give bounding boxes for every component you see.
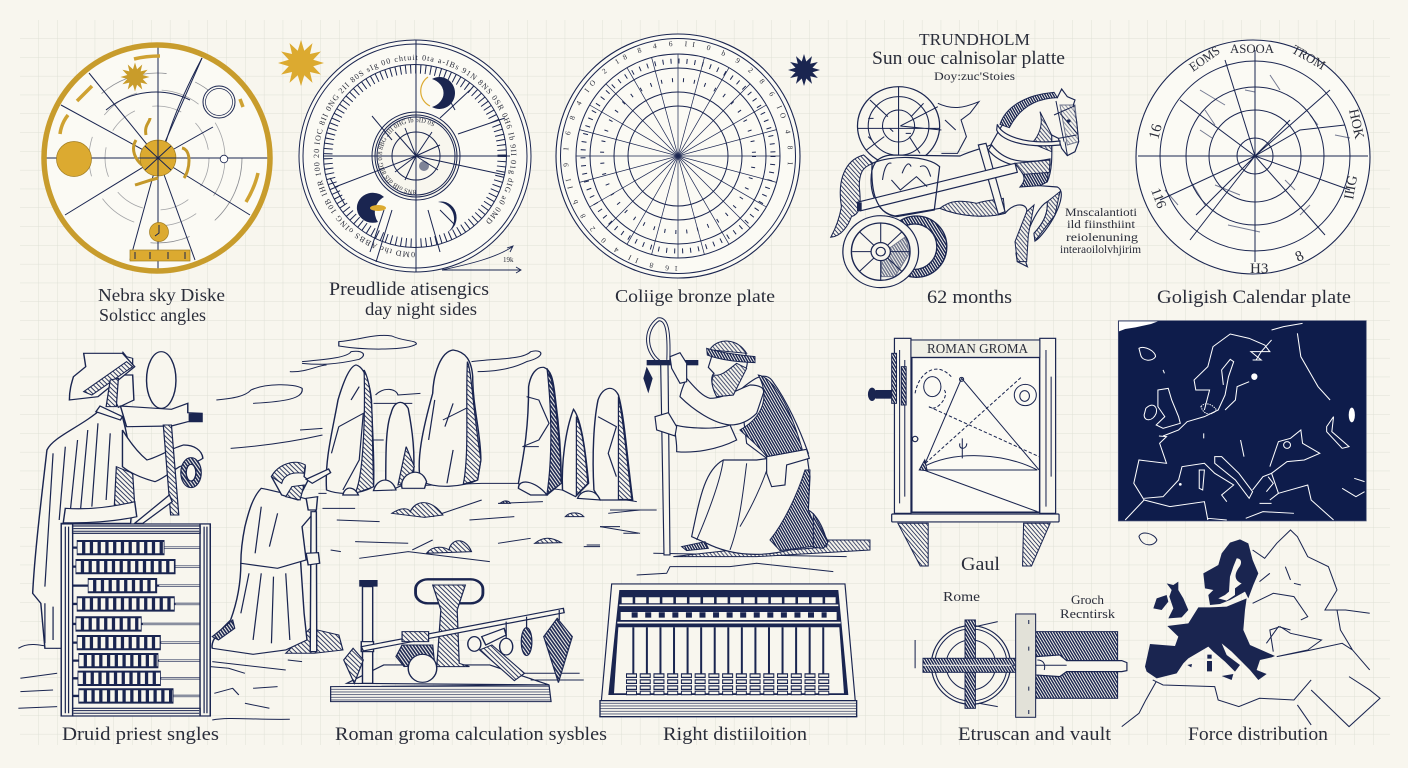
disc lettering: 116: [1147, 186, 1168, 211]
label: Solstice angles: Solsticc angles: [99, 305, 206, 325]
robe lower: [692, 453, 827, 554]
label: day night sides: day night sides: [365, 299, 477, 319]
crescent moons: [357, 77, 457, 232]
panel: bronze plate disc: [555, 34, 801, 278]
cape: [33, 408, 132, 648]
label: Recntirsk: Recntirsk: [1060, 606, 1116, 621]
abacus rods and beads: [71, 548, 200, 696]
collar straps: [997, 124, 1060, 146]
plumb bobs: [344, 610, 572, 683]
gold lower disc: [150, 222, 168, 242]
top beads: [632, 607, 827, 623]
label: druid: Druid priest sngles: [62, 724, 219, 745]
back wheel: [886, 216, 947, 277]
ground strokes: [587, 510, 847, 575]
breast plate: [1015, 160, 1050, 174]
breast strap: [988, 145, 1050, 167]
frame window: [912, 357, 1040, 512]
disc lettering: ASOOA: [1230, 41, 1275, 56]
illustration: kneeling surveyor: [587, 319, 870, 575]
dark vault block: [1012, 632, 1127, 698]
horse body: [871, 89, 1079, 267]
disc lettering: IIIG: [1342, 174, 1361, 201]
upper robe: [740, 376, 808, 458]
EU mainland: [1145, 598, 1275, 680]
robe shading: [770, 470, 823, 551]
label: Groch: Groch: [1071, 592, 1104, 607]
label: Etruscan vault: Etruscan and vault: [958, 724, 1112, 745]
arrows: [442, 246, 521, 273]
sighting device: [120, 352, 202, 523]
stones: [326, 350, 633, 500]
clouds: [216, 335, 541, 448]
arm upper: [680, 378, 764, 425]
panel: Goligish calendar disc: [1136, 40, 1370, 277]
upper windows: [621, 600, 837, 616]
back shading: [740, 375, 803, 457]
hands: [655, 353, 687, 436]
note: chariot annotation: ild fiinsthiint: [1067, 219, 1136, 231]
upright pole: [359, 580, 378, 683]
small gold sun: [120, 62, 150, 92]
label: bronze plate: Coliige bronze plate: [615, 286, 775, 306]
diagram: [915, 369, 1039, 512]
observer hood and head: [271, 462, 308, 500]
Mediterranean islands: [1187, 655, 1233, 680]
thin neighbouring borders: [1122, 530, 1380, 727]
label: calendar plate: Goligish Calendar plate: [1157, 287, 1351, 308]
illustration: counting-board abacus: [600, 584, 857, 717]
panel: Preudlide astrolabe disc: [298, 40, 532, 274]
disc lettering: [1146, 41, 1366, 277]
observer shadow: [286, 628, 343, 653]
illustration: Etruscan vault section: [915, 614, 1127, 717]
front wheel: [843, 216, 919, 288]
head and beard: [707, 341, 755, 397]
British Isles: [1153, 582, 1188, 618]
cape folds: [45, 423, 110, 643]
Scandinavia: [1203, 539, 1258, 605]
illustration: bead abacus upright: [61, 524, 210, 716]
icon: gold sun: [278, 40, 324, 86]
chariot sun disc: [857, 87, 979, 165]
tunic: [114, 467, 135, 507]
outer ring lettering: 0MD thc ABBS oING 10B IHR 100 20 IOC 8II 0NG 2II 80S sIg 00 chtuit 0ta a-IBs 91N 8NS 0SR 0H6 Ib 9II 01g dIG a0 0MD: [314, 54, 516, 258]
abacus vertical rods: [632, 581, 825, 721]
observer folds: [241, 507, 290, 643]
oval handle and column: [416, 579, 483, 667]
note: chariot annotation: interaoilolvhjirim: [1060, 244, 1141, 256]
note: chariot annotation: Mnscalantioti: [1065, 207, 1137, 219]
head: [69, 352, 135, 420]
panel: roman groma frame: [868, 338, 1059, 566]
gold outer ring: [44, 45, 270, 271]
Baltic sea gap: [1218, 558, 1242, 601]
disc lettering: 8: [1293, 248, 1306, 266]
heading: sun plate: Sun ouc calnisolar platte: [872, 48, 1065, 69]
frame posts: [892, 338, 1059, 522]
hub rings: 8NS oIB dIS 8lIG 0I8 8BG 2III 0HG Ib oID 0S: [378, 118, 435, 194]
illustration: kneeling observer with staff: [212, 462, 343, 654]
label: 62 months: 62 months: [927, 287, 1012, 308]
sight tube: [306, 469, 331, 483]
illustration: druid figure with device: [18, 352, 302, 720]
label: right distribution: Right distiiloition: [663, 724, 808, 745]
radial lines: [576, 54, 780, 258]
gold horizon arcs: [60, 56, 258, 202]
panel: Nebra sky disc: [44, 45, 270, 271]
abacus bead stacks: [626, 676, 832, 693]
plate: [1016, 614, 1036, 717]
balance beam: [361, 608, 564, 651]
crank handle: [868, 353, 918, 442]
gold sun body, centre: [134, 118, 189, 185]
panel: EU map silhouette: [1122, 530, 1380, 727]
box dark frame: [608, 590, 848, 695]
heading: Trundholm: TRUNDHOLM: [919, 30, 1030, 49]
caption: day: Doy:zuc'Stoies: [934, 69, 1015, 83]
icon: dark star: [788, 54, 820, 86]
observer robe: [212, 553, 307, 654]
feet: [682, 513, 828, 551]
disc lettering: TROM: [1290, 42, 1329, 73]
pouch and belt: [767, 449, 809, 487]
plate numerals: 16 8 II 4 0 2 8 b II 9 1 6 8 4 IO 2 18 8 4 6 II 0 b 9 2 8 6 IO 4 8 1: [563, 41, 793, 271]
arrows: 19k: [503, 256, 514, 264]
disc lettering: H3: [1250, 261, 1268, 277]
label: Rome: Rome: [943, 590, 980, 605]
robe folds: [697, 460, 770, 550]
label: force distribution: Force distribution: [1188, 724, 1329, 745]
rail dividers: [617, 605, 841, 623]
arm lower: [675, 425, 737, 452]
hub rings: [372, 112, 460, 200]
gold full moon: [56, 142, 92, 176]
label: Nebra sky: Nebra sky Diske: [98, 285, 225, 305]
mane: [1000, 92, 1057, 128]
horse figure: [857, 89, 1079, 267]
ball and cylinder: [396, 628, 525, 682]
disc lettering: HOK: [1345, 108, 1366, 141]
saddle cloth: [872, 157, 940, 217]
frame legs: [898, 523, 1050, 566]
illustration: Trundholm sun chariot: [831, 87, 1079, 288]
note: chariot annotation: reiolenuning: [1066, 232, 1138, 244]
label: Gaul: Gaul: [961, 554, 1000, 575]
observer staff: [310, 512, 317, 652]
label: groma calculation: Roman groma calculation sysbles: [335, 724, 607, 745]
base plate: [331, 665, 584, 702]
wheel: [915, 620, 1016, 708]
boulders: [343, 472, 600, 553]
disc lettering: EOMS: [1186, 43, 1223, 74]
coastlines: [1125, 323, 1365, 520]
panel: dark map of Europe: [1118, 321, 1366, 521]
bridle: [1054, 101, 1078, 155]
note: chariot annotation: [1060, 207, 1141, 256]
disc lettering: 16: [1146, 122, 1166, 141]
lower open bay: [614, 627, 844, 693]
horse shading: [940, 105, 1079, 262]
ground: [318, 483, 640, 562]
ring moon: [203, 86, 235, 118]
shaft: [857, 163, 1017, 211]
arm: [122, 430, 203, 482]
gold bar: [130, 250, 190, 261]
girth strap: [978, 143, 1005, 214]
box front panel: [600, 701, 857, 717]
abacus frame bars: [61, 524, 210, 716]
observer hands: [306, 497, 320, 565]
illustration: standing stones landscape: [216, 335, 640, 562]
label: Preudlide: Preudlide atisengics: [329, 279, 489, 300]
text: roman groma plate: ROMAN GROMA: [927, 341, 1028, 356]
surveyor staff: [643, 319, 698, 555]
horse tail: [831, 155, 873, 237]
observer upper body: [241, 488, 316, 568]
belt: [63, 502, 137, 523]
illustration: groma instrument on base: [331, 579, 584, 702]
ground marks: [18, 644, 302, 720]
